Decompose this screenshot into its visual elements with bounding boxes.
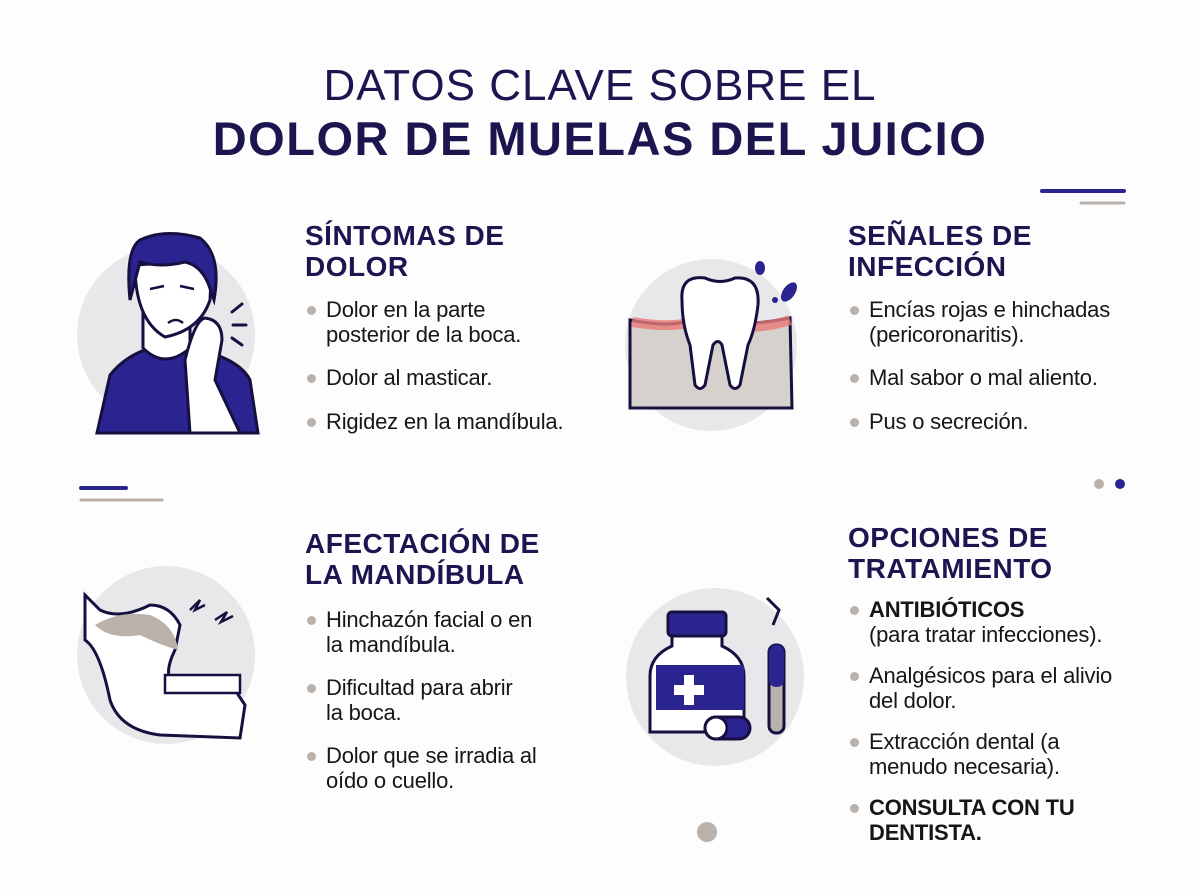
heading: sintomas: DOLOR [305,251,409,282]
icon: person in pain [77,233,258,433]
heading: sintomas: SÍNTOMAS DE [305,220,504,251]
panel: infeccion [848,220,1110,434]
panel: sintomas: posterior de la boca. [326,322,521,346]
panel: tratamiento [848,522,1112,844]
panel: tratamiento: ANTIBIÓTICOS [869,597,1024,622]
heading: mandibula: LA MANDÍBULA [305,559,525,590]
panel: mandibula: la boca. [326,700,401,724]
heading: tratamiento [848,522,1053,584]
icon: jaw [77,566,255,744]
panel: tratamiento: del dolor. [869,688,956,712]
panel: sintomas: Rigidez en la mandíbula. [326,408,563,434]
icon: medicine [626,588,804,766]
panel: mandibula [305,528,540,792]
heading: sintomas [305,220,504,282]
heading: mandibula [305,528,540,590]
panel: mandibula: Dolor que se irradia al [326,743,537,768]
panel: mandibula: oído o cuello. [326,768,454,792]
title: DOLOR DE MUELAS DEL JUICIO [213,112,987,165]
panel: sintomas: Dolor al masticar. [326,365,492,390]
title: DATOS CLAVE SOBRE EL [323,61,877,110]
panel: tratamiento: Extracción dental (a [869,729,1059,754]
heading: infeccion: SEÑALES DE [848,220,1032,251]
heading: tratamiento: TRATAMIENTO [848,553,1053,584]
heading: mandibula: AFECTACIÓN DE [305,528,540,559]
heading: tratamiento: OPCIONES DE [848,522,1048,553]
panel: infeccion: Encías rojas e hinchadas [869,297,1110,322]
panel: tratamiento: menudo necesaria). [869,754,1060,778]
icon: infected tooth [625,259,800,431]
panel: mandibula: la mandíbula. [326,632,456,656]
panel: tratamiento: DENTISTA. [869,820,982,844]
heading: infeccion: INFECCIÓN [848,251,1006,282]
panel: mandibula: Dificultad para abrir [326,675,513,700]
panel: mandibula: Hinchazón facial o en [326,607,532,632]
heading: infeccion [848,220,1032,282]
panel: infeccion: Pus o secreción. [869,408,1028,434]
panel: infeccion: Mal sabor o mal aliento. [869,365,1098,390]
panel: sintomas [305,220,563,434]
panel: sintomas: Dolor en la parte [326,297,485,322]
panel: tratamiento: (para tratar infecciones). [869,622,1102,646]
title [213,61,987,165]
panel: infeccion: (pericoronaritis). [869,322,1024,346]
panel: tratamiento: Analgésicos para el alivio [869,663,1112,688]
panel: tratamiento: CONSULTA CON TU [869,795,1075,820]
